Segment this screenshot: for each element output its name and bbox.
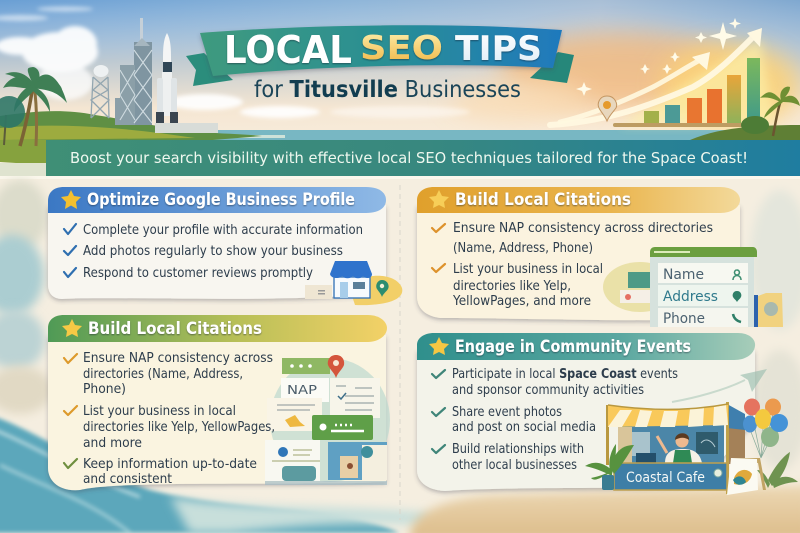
checklist — [64, 351, 275, 487]
checklist: Ensure NAP consistency across — [83, 351, 273, 366]
icon: launch tower — [115, 18, 152, 125]
icon: palm trees — [0, 67, 67, 146]
icon: water tower — [91, 65, 109, 118]
icon: storefront — [305, 261, 402, 305]
ribbon right tail — [530, 52, 574, 83]
title text: TIPS — [455, 29, 542, 69]
icon: paper plane — [672, 369, 767, 402]
illustration: NAP directory cards — [265, 355, 390, 485]
checklist: directories like Yelp, YellowPages, — [83, 420, 275, 435]
panel: Build Local Citations (left) — [48, 315, 390, 490]
counter — [614, 463, 727, 490]
island vegetation — [0, 111, 262, 176]
ribbon left tail — [186, 53, 233, 86]
bars — [613, 58, 763, 127]
illustration: NAP directory cards: NAP — [287, 382, 318, 397]
stall back wall — [618, 425, 724, 465]
checklist: Keep information up-to-date — [83, 457, 257, 472]
sandwich sign — [727, 458, 766, 495]
checklist: Respond to customer reviews promptly — [83, 266, 313, 281]
panel heading — [417, 333, 755, 360]
panel body — [417, 205, 740, 320]
title text: SEO — [360, 28, 443, 67]
panel body — [48, 205, 386, 299]
awning — [608, 404, 728, 427]
checklist: other local businesses — [452, 458, 577, 473]
checklist: (Name, Address, Phone) — [453, 241, 593, 256]
ribbon body — [200, 25, 562, 76]
icon: rocket — [155, 33, 218, 133]
checklist: and more — [83, 436, 142, 451]
plants — [585, 444, 798, 490]
blob and side tabs — [603, 262, 677, 312]
checklist: List your business in local — [453, 262, 603, 277]
panel body — [48, 335, 386, 490]
checklist — [64, 223, 363, 281]
checklist: Complete your profile with accurate information — [83, 223, 363, 238]
title text — [224, 28, 542, 72]
panel: Engage in Community Events — [417, 333, 798, 495]
chart glow — [620, 40, 775, 125]
illustration: NAP card: Phone — [663, 311, 705, 327]
tagline band: Boost your search visibility with effective local SEO techniques tailored for the Space Coast! — [70, 149, 748, 167]
vendor — [636, 433, 702, 463]
checklist: Participate in local Space Coast events — [452, 367, 678, 382]
panel heading: Build Local Citations — [88, 319, 262, 338]
checklist: YellowPages, and more — [452, 294, 591, 309]
right palm and shore — [690, 87, 800, 140]
illustration: NAP card: Name — [663, 267, 704, 283]
panel heading — [417, 187, 740, 213]
checklist — [432, 367, 678, 473]
panel heading — [48, 315, 387, 342]
title text: LOCAL — [224, 28, 352, 72]
card — [650, 247, 757, 257]
checklist: directories like Yelp, — [453, 279, 571, 294]
panel heading: Build Local Citations — [455, 190, 631, 209]
illustration: Coastal Cafe stall — [585, 398, 798, 495]
illustration: NAP card — [603, 247, 783, 327]
panel body — [417, 350, 755, 491]
tagline band — [46, 140, 800, 176]
checklist: List your business in local — [83, 404, 236, 419]
checklist: Add photos regularly to show your business — [83, 244, 343, 259]
growth arrows — [550, 38, 752, 125]
panel heading — [48, 187, 386, 213]
stall posts — [606, 405, 609, 465]
checklist: Ensure NAP consistency across directories — [453, 221, 713, 236]
checklist: and post on social media — [452, 420, 596, 435]
checklist — [432, 221, 713, 309]
checklist: Phone) — [83, 382, 126, 397]
illustration: NAP card: Address — [663, 289, 718, 305]
checklist: directories (Name, Address, — [83, 367, 243, 382]
checklist: and consistent — [83, 472, 172, 487]
checklist: Build relationships with — [452, 442, 584, 457]
panel heading: Optimize Google Business Profile — [87, 190, 355, 209]
growth chart illustration — [550, 18, 800, 140]
title ribbon — [186, 25, 574, 86]
checklist: Share event photos — [452, 405, 562, 420]
subtitle: for Titusville Businesses — [254, 77, 521, 103]
sparkles — [576, 18, 741, 96]
checklist: and sponsor community activities — [452, 383, 644, 398]
icon: map pin — [598, 96, 617, 121]
illustration: Coastal Cafe stall: Coastal Cafe — [626, 470, 705, 486]
balloons — [743, 398, 788, 458]
panel: Optimize Google Business Profile — [48, 187, 402, 305]
panel heading: Engage in Community Events — [455, 337, 691, 356]
panel: Build Local Citations (right) — [417, 187, 783, 327]
